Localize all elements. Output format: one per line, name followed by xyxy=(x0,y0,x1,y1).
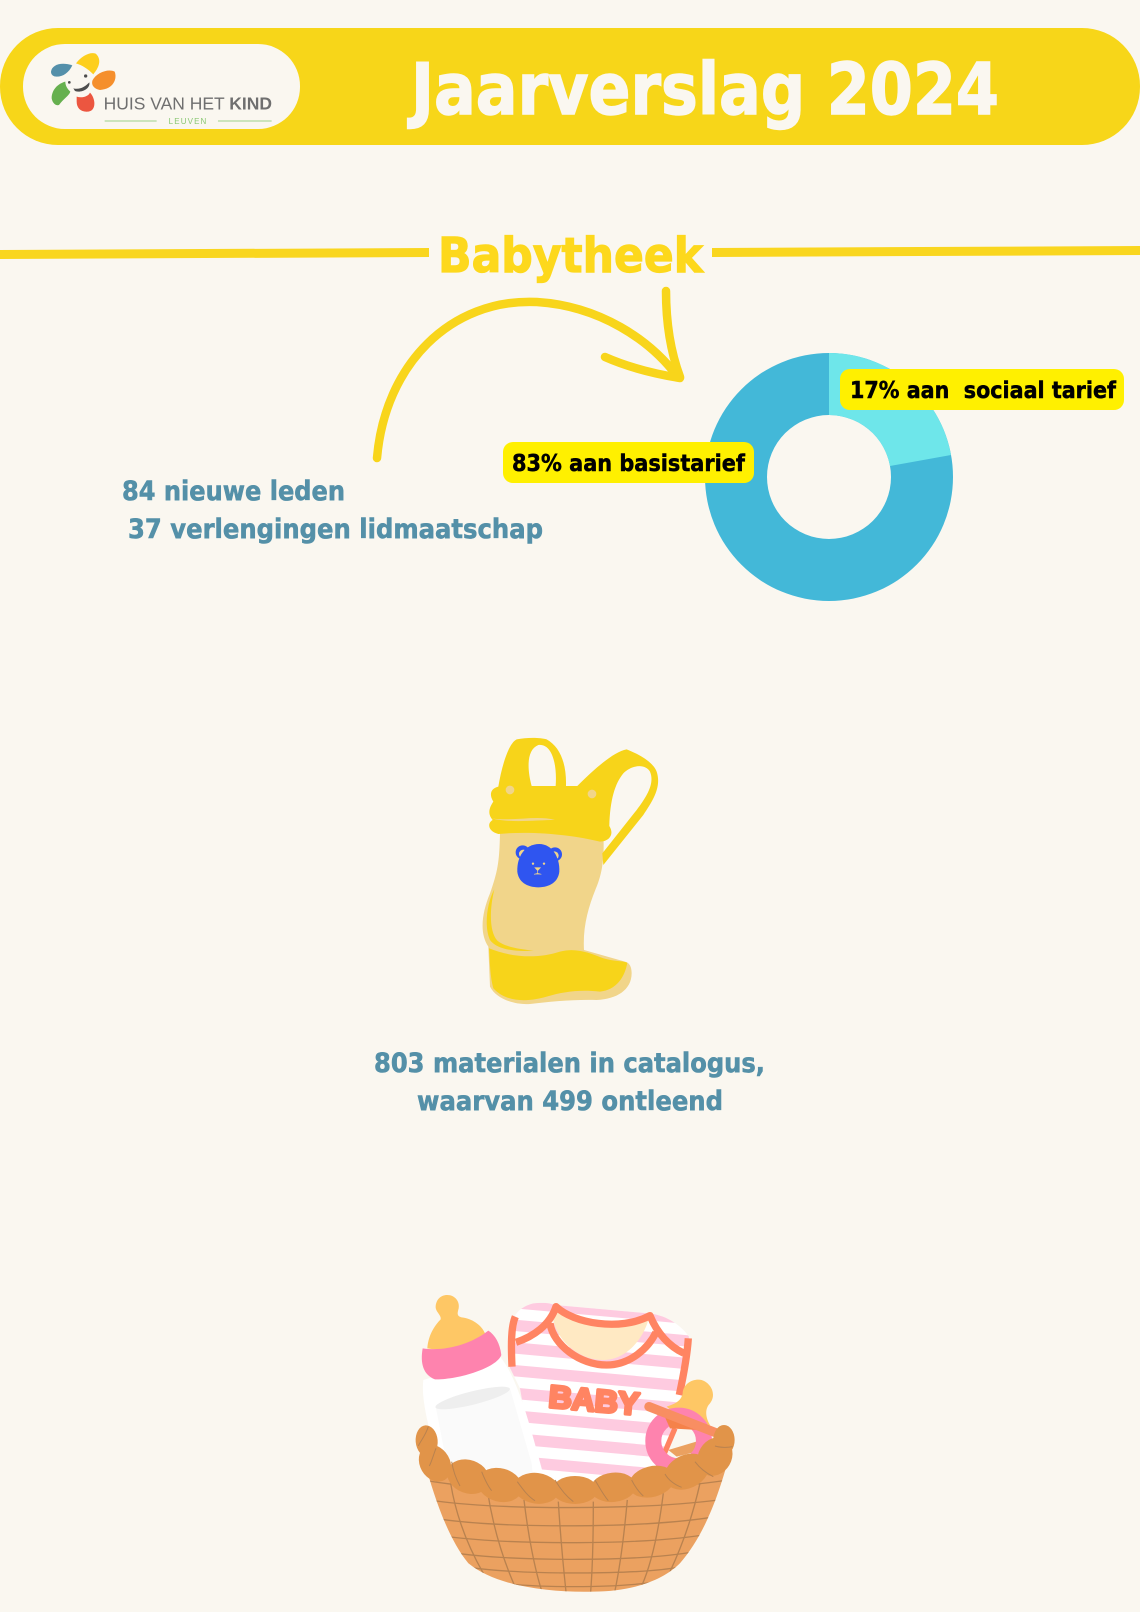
logo pill xyxy=(23,44,300,129)
text: members xyxy=(122,476,543,545)
text: catalogue: 803 materialen in catalogus, xyxy=(374,1048,765,1079)
label: 83% basistarief: 83% aan basistarief xyxy=(512,451,746,477)
header banner xyxy=(0,28,1140,145)
section heading: Babytheek: Babytheek xyxy=(438,228,704,284)
icon: baby basket xyxy=(412,1295,739,1592)
title: Jaarverslag 2024 xyxy=(408,48,999,131)
logo subtitle: LEUVEN xyxy=(169,117,207,126)
section heading: Babytheek xyxy=(0,228,1140,284)
romper text: BABY xyxy=(547,1379,641,1422)
baby bottle xyxy=(422,1295,545,1480)
basket rim xyxy=(412,1424,739,1507)
label: 17% sociaal tarief xyxy=(840,369,1124,410)
arrow xyxy=(377,291,680,458)
label: 17% sociaal tarief: 17% aan sociaal tarief xyxy=(850,378,1117,404)
text: catalogue: waarvan 499 ontleend xyxy=(417,1086,723,1117)
text: members: 37 verlengingen lidmaatschap xyxy=(128,514,543,545)
icon: baby carrier xyxy=(483,738,658,1004)
pacifier xyxy=(649,1380,717,1470)
baby romper xyxy=(508,1303,692,1482)
woven basket xyxy=(412,1424,739,1592)
text: members: 84 nieuwe leden xyxy=(122,476,345,507)
label: 83% basistarief xyxy=(503,442,754,483)
donut chart xyxy=(705,353,953,601)
logo: Huis van het Kind xyxy=(51,53,272,126)
icon: bear face xyxy=(516,844,562,887)
logo wordmark: HUIS VAN HET KIND xyxy=(104,93,272,113)
text: catalogue xyxy=(374,1048,765,1117)
